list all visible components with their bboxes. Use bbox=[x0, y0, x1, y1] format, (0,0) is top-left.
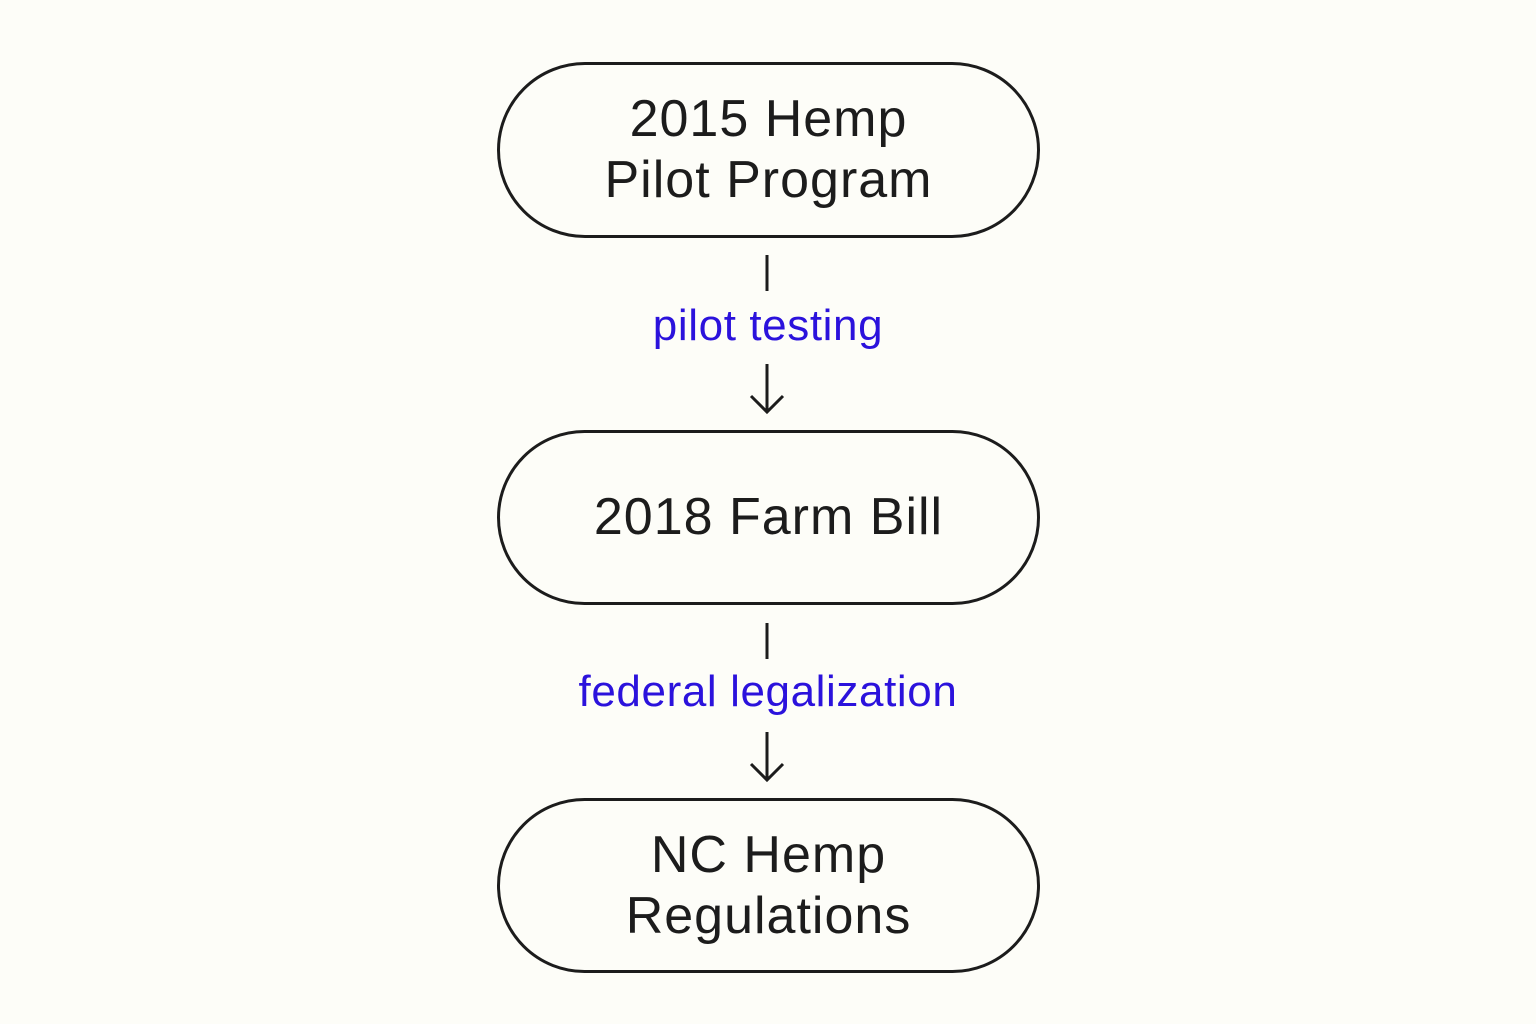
node: 2015 Hemp Pilot Program: Pilot Program bbox=[604, 151, 932, 209]
node: 2018 Farm Bill bbox=[497, 430, 1040, 605]
node: 2015 Hemp Pilot Program: 2015 Hemp bbox=[630, 90, 907, 148]
node: NC Hemp Regulations: Regulations bbox=[626, 886, 911, 944]
node: NC Hemp Regulations: NC Hemp bbox=[651, 826, 886, 884]
node: NC Hemp Regulations bbox=[497, 798, 1040, 973]
node: 2018 Farm Bill: 2018 Farm Bill bbox=[594, 488, 943, 546]
label: federal legalization: federal legalization bbox=[579, 667, 957, 716]
label: pilot testing: pilot testing bbox=[653, 301, 883, 350]
node: 2015 Hemp Pilot Program bbox=[497, 62, 1040, 238]
